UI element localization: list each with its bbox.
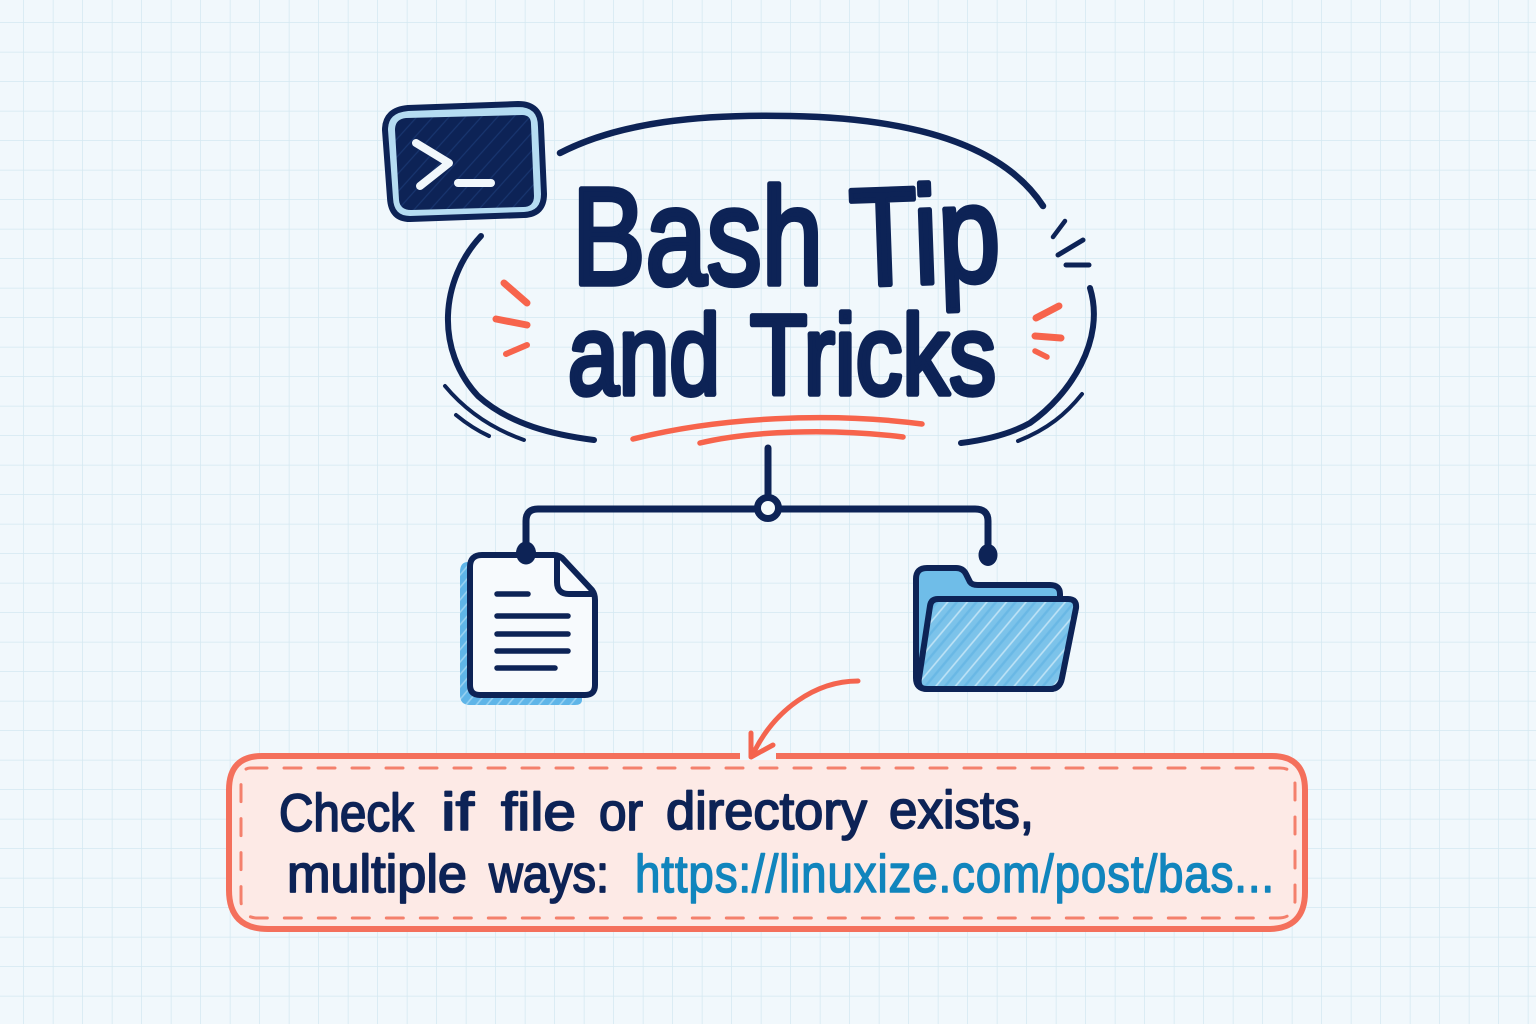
callout text line 1: file [501,783,576,842]
callout text line 1: exists, [889,781,1034,840]
coral accent marks [496,283,1061,443]
callout link: https://linuxize.com/post/bas... [635,845,1275,904]
decorative speech loop around title [445,116,1094,443]
callout text line 2: multiple [287,845,467,904]
callout text line 1 [279,781,1034,843]
icon: terminal window [385,104,544,219]
callout text line 1: Check [279,784,414,843]
title word: Tricks: Tricks [750,292,996,418]
callout text line 1: if [441,783,474,842]
callout text line 1: directory [666,782,867,841]
callout text line 2: ways: [488,845,609,904]
arrow: folder to callout [751,681,858,757]
icon: document [460,542,595,705]
title word: and: and [568,292,720,418]
callout box [229,756,1305,929]
title [568,156,1003,418]
callout text line 2 [287,845,609,904]
connector tree [526,448,998,566]
title word: Tip: Tip [847,156,1003,316]
icon: folder [916,568,1076,689]
title word: Bash: Bash [572,160,823,314]
callout text line 1: or [599,783,643,842]
